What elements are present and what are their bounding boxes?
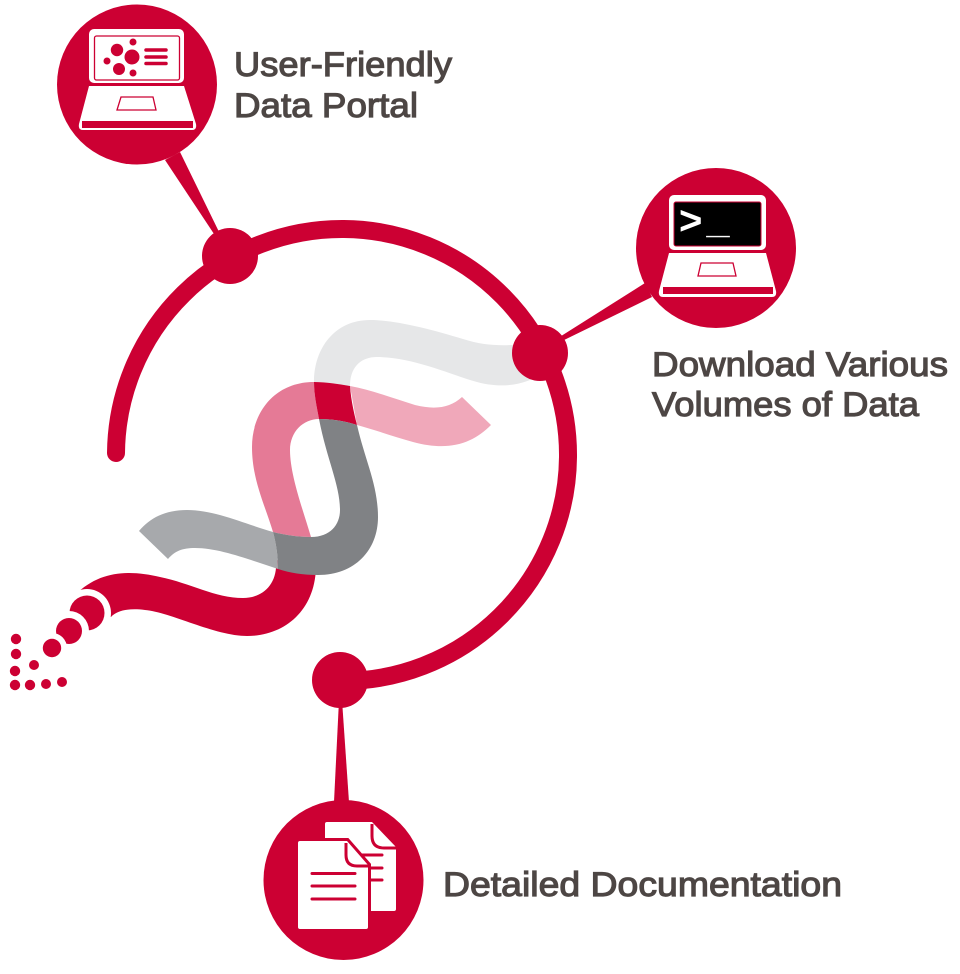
label: download various volumes of data <box>652 346 948 424</box>
label: detailed documentation: Detailed Documentation <box>443 866 842 904</box>
ribbon: light pink segment <box>350 386 491 446</box>
label: user-friendly data portal: User-Friendly <box>234 46 453 84</box>
ribbon: light gray segment <box>314 320 535 386</box>
label: download various volumes of data: Download Various <box>652 346 948 384</box>
large circular arc <box>116 229 568 681</box>
label: download various volumes of data: Volumes of Data <box>652 386 920 424</box>
dissolving ribbon tail dots <box>10 589 111 690</box>
ribbon: pink segment <box>252 382 319 537</box>
icon: documents <box>264 800 424 960</box>
ribbon: red lower segment <box>75 560 316 636</box>
node and connector: download <box>512 283 652 381</box>
node and connector: data portal <box>165 152 258 284</box>
ribbon: medium gray segment <box>139 510 278 569</box>
label: user-friendly data portal: Data Portal <box>234 87 418 125</box>
icon: laptop with data portal screen <box>57 4 217 164</box>
node and connector: documentation <box>312 652 368 802</box>
ribbon: dark gray segment <box>273 419 378 575</box>
icon: laptop with terminal screen: > <box>679 199 702 243</box>
icon: laptop with terminal screen: _ <box>705 213 729 239</box>
icon: laptop with terminal screen <box>636 168 796 328</box>
ribbon: data stream <box>75 320 535 636</box>
label: user-friendly data portal <box>234 46 453 125</box>
ribbon: red crossing <box>314 382 357 425</box>
